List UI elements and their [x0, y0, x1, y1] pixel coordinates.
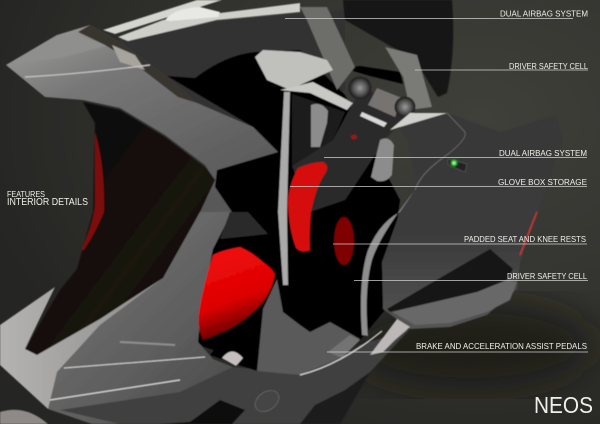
right gauge [395, 97, 415, 117]
wing glass tip [6, 25, 197, 103]
hood seam [415, 113, 465, 190]
seat mount spokes [210, 309, 263, 371]
white swoosh [370, 319, 410, 355]
hood lower highlight [392, 280, 517, 325]
green indicator light [449, 158, 459, 168]
red seat cushion [198, 247, 275, 340]
cabin floor [257, 279, 360, 375]
hood panel [382, 113, 563, 329]
label: dual airbag system top: DUAL AIRBAG SYSTEM [500, 8, 588, 18]
label: padded seat and knee rests: PADDED SEAT AND KNEE RESTS [464, 234, 586, 244]
red knee rest [334, 217, 354, 265]
label: driver safety cell lower: DRIVER SAFETY CELL [507, 271, 587, 281]
green indicator slot [448, 159, 467, 172]
white pillar [278, 92, 290, 285]
label: glove box storage: GLOVE BOX STORAGE [498, 177, 587, 187]
door gray strut [385, 47, 432, 110]
wing upper panel [6, 25, 278, 212]
windscreen pillar [300, 7, 355, 90]
lower front mechanism [160, 400, 245, 424]
steering red badge [351, 135, 357, 139]
upper dark shell [118, 10, 345, 152]
label: brake and acceleration assist pedals: BRAKE AND ACCELERATION ASSIST PEDALS [416, 341, 587, 351]
title: features interior details: FEATURES [7, 189, 45, 199]
black cabin interior [167, 50, 400, 378]
white roof struts [103, 0, 300, 41]
hood dark window [387, 249, 513, 312]
front wheel hub [0, 410, 48, 424]
dark backdrop behind column [292, 94, 345, 166]
lower wing main body [48, 212, 410, 424]
white hood shoulder [390, 113, 452, 130]
red seat edge strip [81, 132, 104, 250]
red seat back [288, 162, 327, 252]
label: driver safety cell top: DRIVER SAFETY CELL [509, 61, 588, 71]
emblem [251, 386, 283, 416]
light dash panel [255, 50, 333, 90]
red side stripe [520, 212, 537, 255]
display white bar [360, 112, 387, 127]
ground shadow [345, 300, 595, 390]
wing interior cavity [25, 102, 215, 355]
white dash sweep [280, 82, 353, 110]
tire tread [300, 372, 370, 424]
door glass and frame [343, 0, 453, 97]
title: features interior details: INTERIOR DETAILS [7, 197, 88, 208]
title: features interior details [7, 189, 88, 208]
lower dark fairing [60, 329, 410, 424]
black swoosh under door [343, 66, 403, 84]
instrument display [368, 88, 402, 117]
airbag column right [371, 138, 394, 181]
logo: NEOS: NEOS [534, 392, 593, 418]
wing highlight streaks [50, 342, 205, 400]
airbag column left [311, 104, 328, 147]
label: dual airbag system middle: DUAL AIRBAG SYSTEM [499, 148, 587, 158]
left gauge [349, 77, 371, 99]
floor white trim [300, 331, 382, 375]
curved door sill [361, 190, 415, 336]
steering pod [292, 86, 410, 212]
dark wedge behind seat [220, 212, 268, 239]
lower wing light flank [0, 278, 163, 409]
pedal hatch [328, 335, 360, 358]
